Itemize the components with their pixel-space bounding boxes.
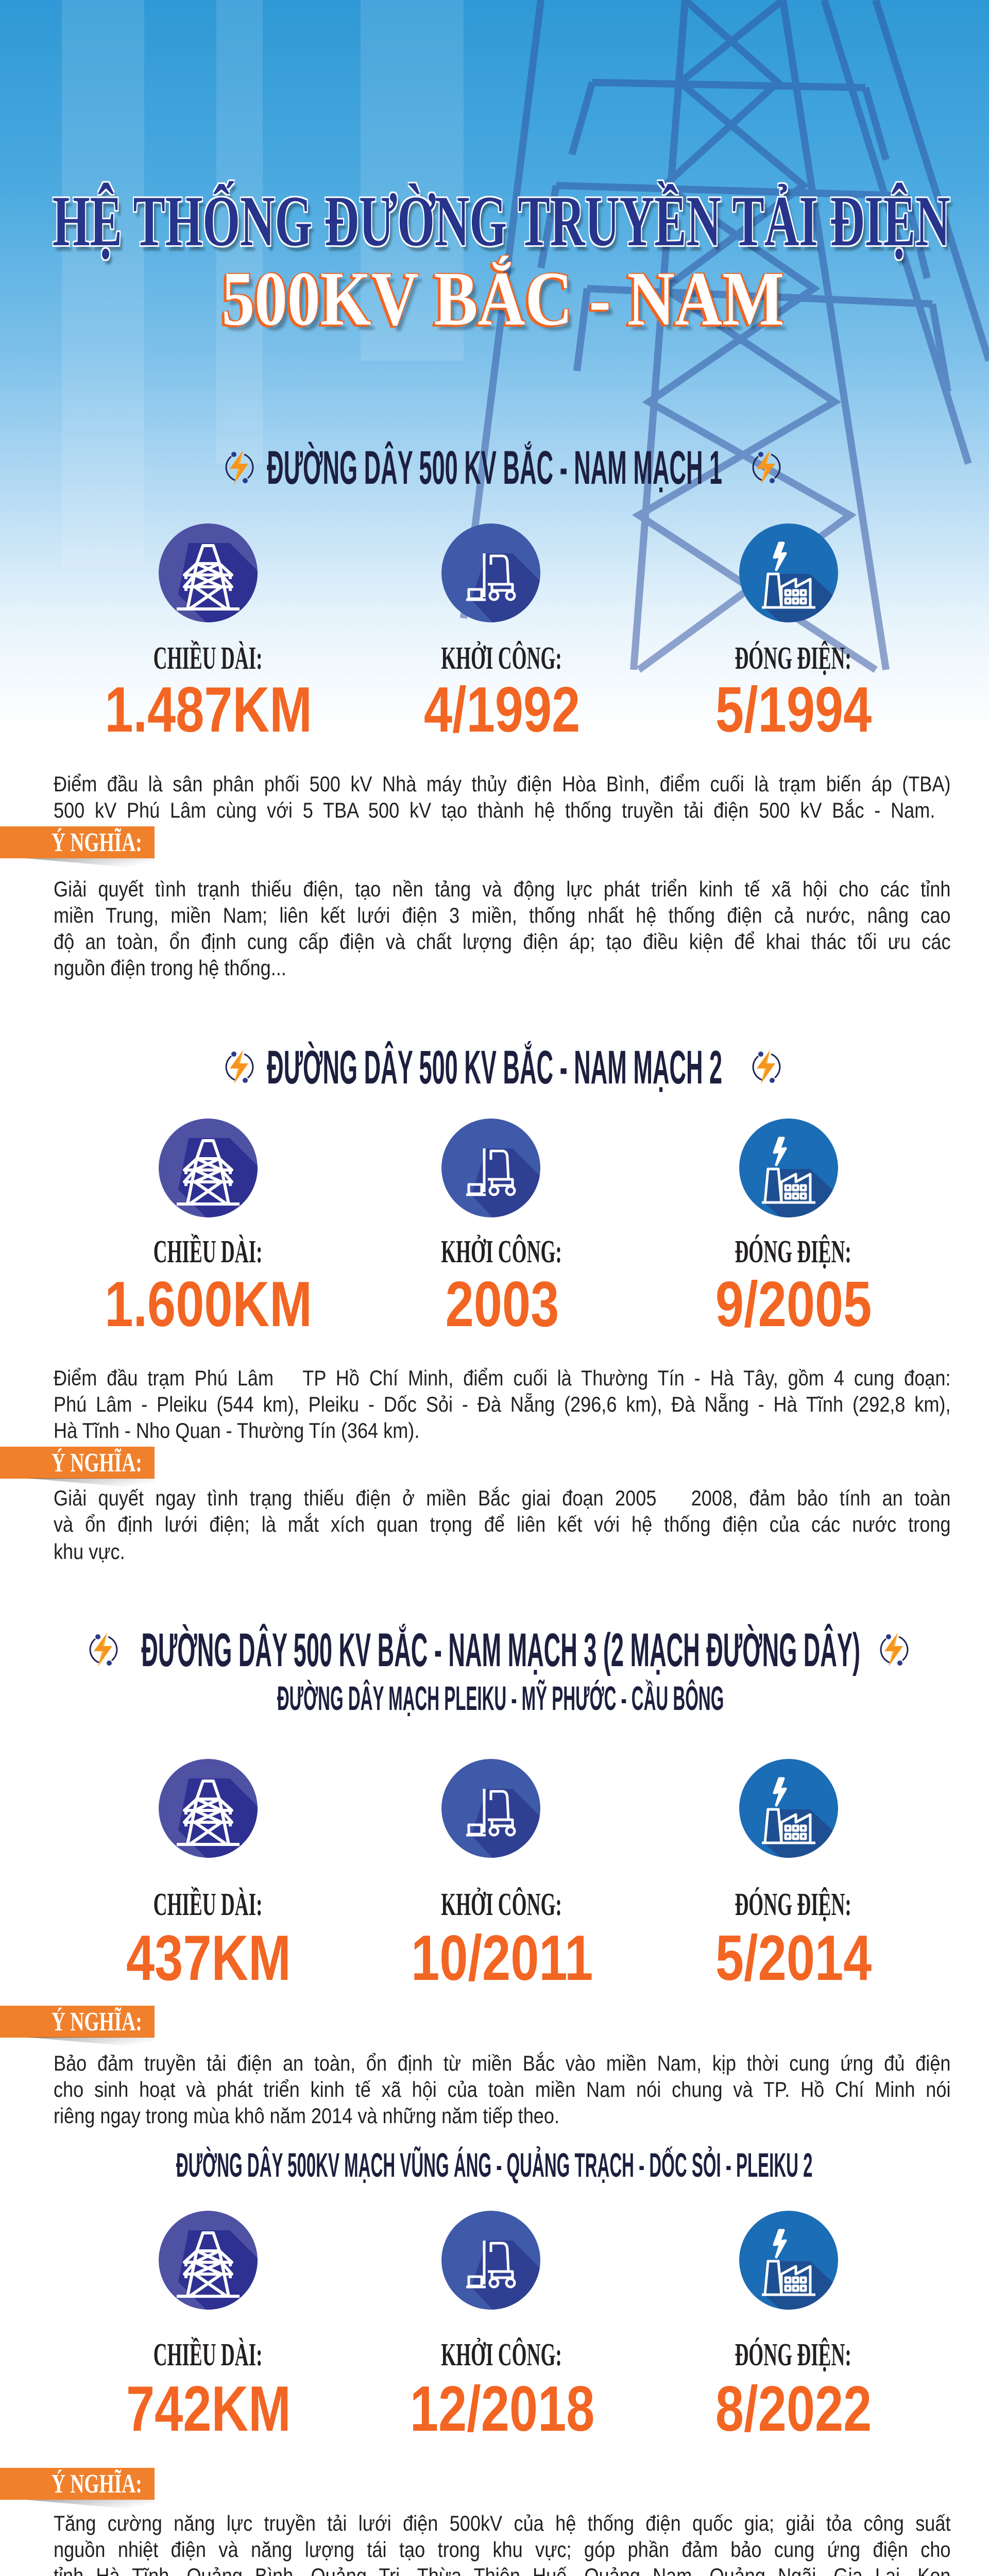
subheading: Vũng Áng - Quảng Trạch - Dốc Sỏi - Pleiku 2: ĐƯỜNG DÂY 500KV MẠCH VŨNG ÁNG - QUẢNG TRẠCH - DỐC SỎI - PLEIKU 2 [176,2146,813,2184]
label: khởi công: KHỞI CÔNG: [441,1234,561,1269]
description 2: Điểm đầu trạm Phú Lâm TP Hồ Chí Minh, điểm cuối là Thường Tín - Hà Tây, gồm 4 cung đoạn: [54,1366,951,1390]
description 1 [54,771,951,823]
value: energized: 5/1994 [715,674,872,745]
value: start: 12/2018 [410,2374,594,2445]
stats row 2 [105,1118,872,1340]
tag: ý nghĩa 3 [0,2006,155,2038]
icon: bolt left [226,450,253,484]
stats row 3b [126,2211,872,2445]
label: đóng điện: ĐÓNG ĐIỆN: [735,2337,851,2372]
value: length: 742KM [126,2374,291,2445]
heading: mạch 1 [226,450,781,484]
icon: factory [739,523,838,622]
icon: forklift [440,2210,541,2311]
meaning text 1: Giải quyết tình trạnh thiếu điện, tạo nền tảng và động lực phát triển kinh tế xã hội cho các tỉnh [54,877,951,901]
stats row 3 [126,1759,872,1994]
icon: forklift [441,1118,540,1217]
meaning text 1: miền Trung, miền Nam; liên kết lưới điện 3 miền, thống nhất hệ thống điện cả nước, nâng cao [54,903,951,927]
meaning text 2: và ổn định lưới điện; là mắt xích quan trọng để liên kết với hệ thống điện của các nước trong [54,1512,951,1536]
icon: tower [158,2210,259,2311]
title: HỆ THỐNG ĐƯỜNG TRUYỀN TẢI ĐIỆN [53,181,950,261]
background: top sky with pylon [0,0,989,732]
icon: tower [159,1118,258,1217]
tag: ý nghĩa 1 [0,826,155,858]
label: chiều dài: CHIỀU DÀI: [154,1234,263,1269]
tag: ý nghĩa 1: Ý NGHĨA: [52,828,142,857]
meaning text 3b [54,2511,951,2576]
label: khởi công: KHỞI CÔNG: [441,2337,561,2372]
value: length: 1.487KM [105,674,312,745]
icon: tower [159,523,258,622]
meaning text 3: Bảo đảm truyền tải điện an toàn, ổn định từ miền Bắc vào miền Nam, kịp thời cung ứng đủ điện [54,2051,951,2075]
meaning text 2: Giải quyết ngay tình trạng thiếu điện ở miền Bắc giai đoạn 2005 2008, đảm bảo tính an toàn [54,1486,951,1510]
meaning text 2: khu vực. [54,1539,125,1564]
icon: bolt left [87,1631,121,1669]
icon: bolt left [223,1048,257,1086]
value: energized: 5/2014 [715,1923,872,1994]
meaning text 3: cho sinh hoạt và phát triển kinh tế xã hội của toàn miền Nam nói chung và TP. Hồ Chí Minh nói [54,2077,951,2102]
meaning text 3b: Tăng cường năng lực truyền tải lưới điện 500kV của hệ thống điện quốc gia; giải tỏa công suất [54,2511,951,2535]
label: chiều dài: CHIỀU DÀI: [154,641,263,676]
label: đóng điện: ĐÓNG ĐIỆN: [735,1887,851,1922]
icon: bolt right [749,1048,783,1086]
meaning text 3 [54,2050,951,2129]
label: khởi công: KHỞI CÔNG: [441,641,561,676]
heading text 2: ĐƯỜNG DÂY 500 KV BẮC - NAM MẠCH 2 [267,1041,722,1094]
value: start: 10/2011 [411,1923,593,1994]
tag: ý nghĩa 3b: Ý NGHĨA: [52,2469,142,2499]
description 1: 500 kV Phú Lâm cùng với 5 TBA 500 kV tạo thành hệ thống truyền tải điện 500 kV Bắc - Nam. [54,798,935,822]
title [53,179,953,342]
description 2 [54,1365,951,1444]
heading: mạch 2 [221,1043,783,1094]
label: chiều dài: CHIỀU DÀI: [154,1887,263,1922]
value: length: 1.600KM [105,1269,312,1340]
label: đóng điện: ĐÓNG ĐIỆN: [735,641,851,676]
icon: forklift [441,523,540,622]
value: start: 2003 [446,1269,559,1340]
tag: ý nghĩa 3b [0,2468,155,2500]
value: start: 4/1992 [424,674,581,745]
description 2: Phú Lâm - Pleiku (544 km), Pleiku - Dốc Sỏi - Đà Nẵng (296,6 km), Đà Nẵng - Hà Tĩnh (292,8 km), [54,1392,951,1416]
meaning text 1 [54,876,951,981]
label: đóng điện: ĐÓNG ĐIỆN: [735,1234,851,1269]
icon: factory [739,1759,838,1858]
value: length: 437KM [126,1923,291,1994]
stats row 1 [105,523,872,745]
meaning text 2 [54,1485,951,1565]
heading text 3: ĐƯỜNG DÂY 500 KV BẮC - NAM MẠCH 3 (2 MẠCH ĐƯỜNG DÂY) [141,1624,860,1676]
label: khởi công: KHỞI CÔNG: [441,1887,561,1922]
icon: factory [739,1118,838,1217]
heading text 1: ĐƯỜNG DÂY 500 KV BẮC - NAM MẠCH 1 [267,442,722,494]
meaning text 1: độ an toàn, ổn định cung cấp điện và chất lượng điện áp; tạo điều kiện để khai thác tối ưu các [54,929,951,954]
meaning text 1: nguồn điện trong hệ thống... [54,956,286,980]
title: 500KV BẮC - NAM [221,256,784,342]
value: energized: 9/2005 [715,1269,872,1340]
label: chiều dài: CHIỀU DÀI: [154,2337,263,2372]
description 2: Hà Tĩnh - Nho Quan - Thường Tín (364 km). [54,1418,419,1443]
icon: forklift [441,1759,540,1858]
icon: tower [159,1759,258,1858]
meaning text 3b: nguồn nhiệt điện và năng lượng tái tạo trong khu vực; góp phần đảm bảo cung ứng điện cho [54,2537,951,2562]
tag: ý nghĩa 3: Ý NGHĨA: [52,2007,142,2037]
tag: ý nghĩa 2: Ý NGHĨA: [52,1448,142,1478]
heading: mạch 3 [87,1625,913,1677]
icon: bolt right [752,450,781,484]
subheading: Pleiku - Mỹ Phước - Cầu Bông: ĐƯỜNG DÂY MẠCH PLEIKU - MỸ PHƯỚC - CẦU BÔNG [277,1679,724,1717]
value: energized: 8/2022 [715,2374,872,2445]
meaning text 3: riêng ngay trong mùa khô năm 2014 và những năm tiếp theo. [54,2104,559,2128]
tag: ý nghĩa 2 [0,1447,155,1479]
description 1: Điểm đầu là sân phân phối 500 kV Nhà máy thủy điện Hòa Bình, điểm cuối là trạm biến áp (TBA) [54,772,951,796]
icon: factory [738,2210,839,2311]
icon: bolt right [877,1631,911,1669]
